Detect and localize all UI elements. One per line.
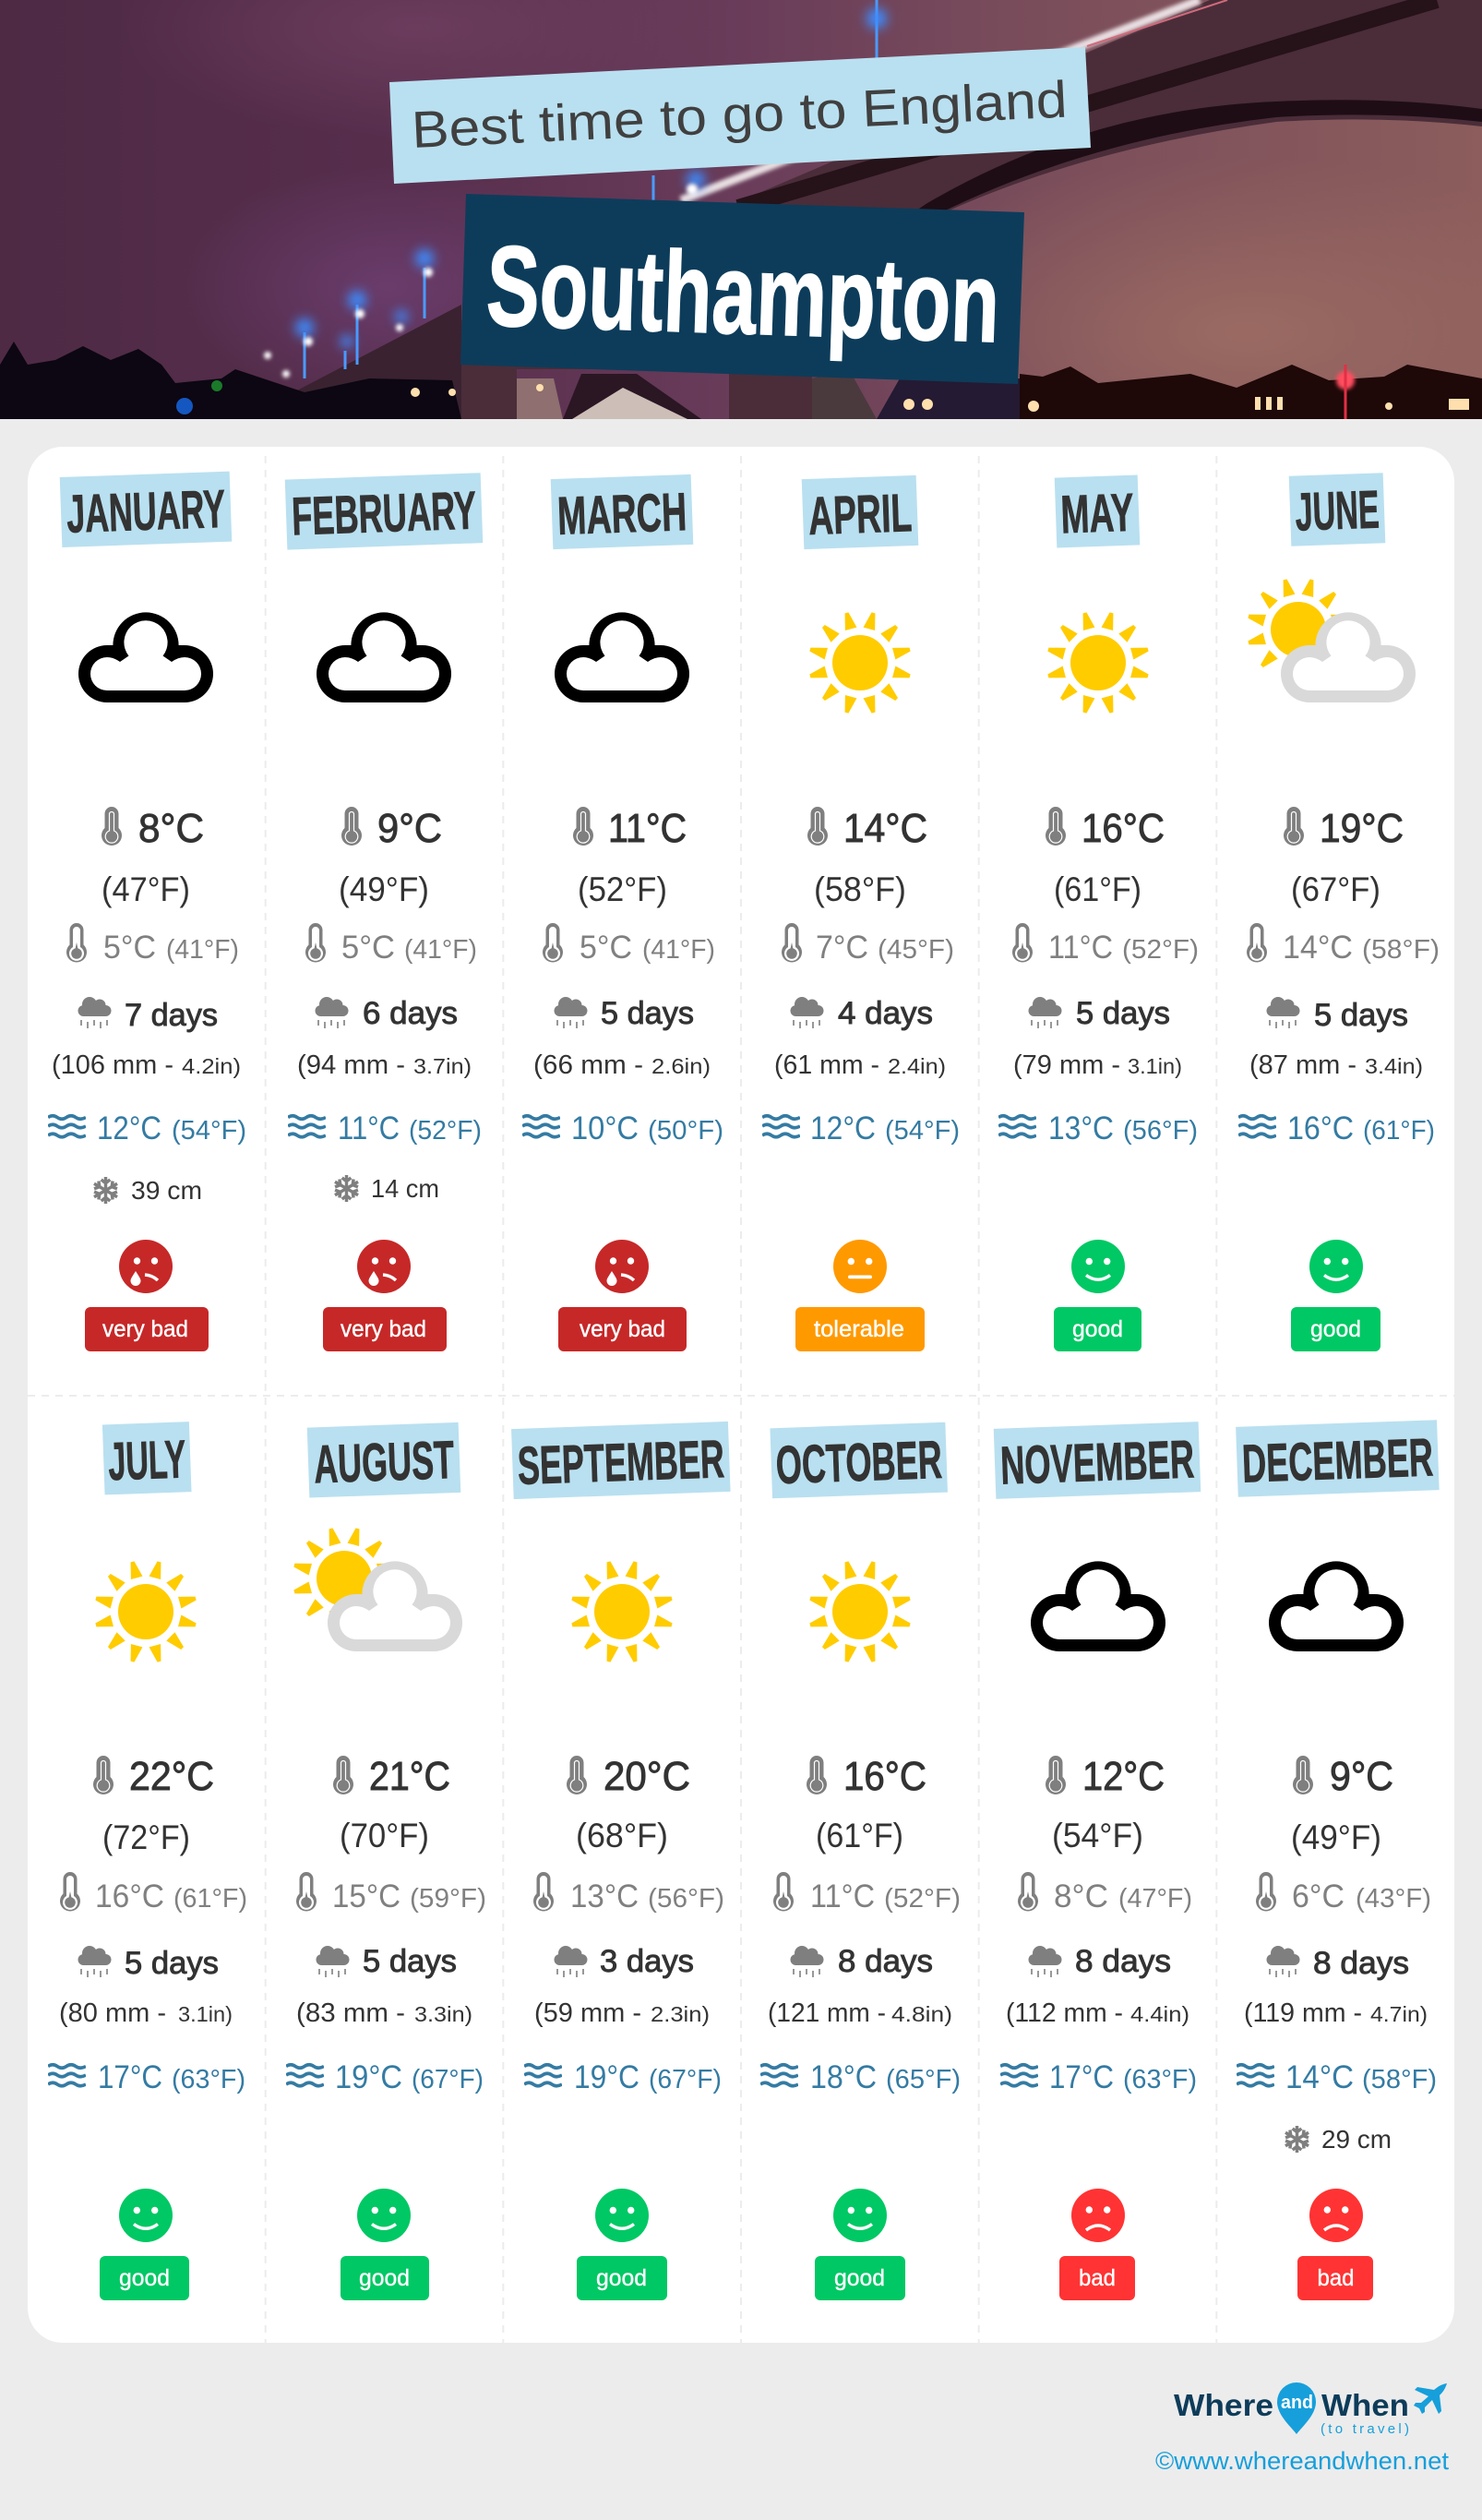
rainfall [768, 1998, 952, 2028]
sea temperature [522, 1110, 723, 1146]
high temperature: 21°C [369, 1754, 450, 1799]
rainfall: 3.1in) [1128, 1054, 1182, 1078]
icon: very bad face [119, 1240, 173, 1293]
high temperature Fahrenheit: (61°F) [1054, 870, 1141, 908]
sea temperature: 18°C [810, 2059, 877, 2095]
low temperature [773, 1872, 961, 1914]
column: September [511, 1422, 731, 2300]
high temperature [567, 1754, 690, 1799]
rain days [790, 1944, 933, 1979]
rating badge [1059, 2256, 1135, 2300]
icon: sun [808, 611, 912, 714]
heading: June [1289, 473, 1385, 546]
low temperature: (41°F) [642, 935, 715, 965]
low temperature [60, 1872, 247, 1914]
low temperature [782, 923, 954, 966]
low temperature: (52°F) [884, 1884, 961, 1914]
sea temperature: (50°F) [648, 1116, 723, 1146]
low temperature: 7°C [816, 930, 868, 966]
rain days [1266, 1946, 1409, 1981]
sea temperature: 14°C [1285, 2059, 1354, 2095]
snow depth: 39 cm [131, 1176, 202, 1205]
icon: sun [1046, 611, 1150, 714]
high temperature: 22°C [129, 1754, 214, 1799]
rain days [78, 1946, 219, 1981]
rating badge: tolerable [814, 1316, 904, 1342]
snow depth [92, 1176, 202, 1205]
icon: map pin [1277, 2382, 1316, 2434]
sea temperature: 17°C [1049, 2059, 1114, 2095]
low temperature: 11°C [810, 1878, 875, 1914]
sea temperature [48, 2059, 245, 2095]
rain days [316, 1944, 457, 1979]
rainfall [533, 1050, 711, 1080]
title: Southampton [460, 194, 1024, 384]
low temperature [296, 1872, 486, 1914]
low temperature [305, 923, 477, 966]
sea temperature: 11°C [338, 1110, 400, 1146]
high temperature Fahrenheit: (61°F) [816, 1817, 903, 1854]
low temperature: 16°C [95, 1878, 164, 1914]
column: March [522, 474, 723, 1351]
high temperature Fahrenheit: (49°F) [1291, 1818, 1381, 1856]
heading: January [60, 472, 232, 547]
column: May [998, 474, 1199, 1351]
rainfall: (66 mm - [533, 1050, 643, 1080]
high temperature [1293, 1754, 1393, 1799]
high temperature Fahrenheit: (54°F) [1052, 1817, 1143, 1854]
heading: February [285, 473, 483, 550]
rainfall: 3.1in) [178, 2002, 233, 2026]
heading: June: JUNE [1294, 479, 1380, 543]
rainfall [296, 1998, 472, 2028]
icon: cloud [317, 612, 451, 702]
rain days: 4 days [838, 996, 933, 1031]
low temperature [1256, 1872, 1431, 1914]
high temperature Fahrenheit: (70°F) [340, 1817, 429, 1854]
rainfall [1013, 1050, 1182, 1080]
rain days [1266, 997, 1408, 1033]
high temperature: 16°C [1082, 806, 1165, 851]
sea temperature [286, 2059, 484, 2095]
high temperature: 11°C [608, 806, 687, 851]
rain days: 5 days [1076, 996, 1170, 1031]
rainfall: 3.4in) [1365, 1054, 1423, 1078]
heading: November: NOVEMBER [999, 1429, 1195, 1496]
rating badge [795, 1307, 925, 1351]
low temperature: 5°C [103, 930, 156, 966]
rain days: 5 days [601, 996, 694, 1031]
sea temperature [762, 1110, 960, 1146]
rain days [790, 996, 933, 1031]
rating badge: bad [1079, 2265, 1116, 2291]
rating badge [1297, 2256, 1373, 2300]
rainfall: (94 mm - [297, 1050, 405, 1080]
rainfall: (121 mm - [768, 1998, 886, 2028]
column: November [994, 1422, 1201, 2300]
sea temperature [998, 1110, 1198, 1146]
rainfall: 4.2in) [182, 1054, 241, 1078]
low temperature: (58°F) [1362, 935, 1440, 965]
heading: October: OCTOBER [775, 1430, 943, 1495]
heading: July: JULY [107, 1429, 186, 1492]
rainfall: 2.6in) [651, 1054, 711, 1078]
rating badge: good [834, 2265, 885, 2291]
heading: May: MAY [1059, 483, 1135, 545]
icon: sun [808, 1560, 912, 1663]
rain days [1028, 1944, 1171, 1979]
high temperature Fahrenheit: (47°F) [102, 870, 190, 908]
icon: smiling face [1309, 1240, 1363, 1293]
sea temperature: (65°F) [886, 2065, 961, 2094]
snow depth: 14 cm [371, 1174, 439, 1203]
rain days [554, 1944, 694, 1979]
heading: October [770, 1422, 948, 1498]
rain days: 6 days [363, 996, 458, 1031]
sea temperature: 13°C [1048, 1110, 1114, 1146]
low temperature: (43°F) [1356, 1884, 1431, 1914]
rain days: 5 days [125, 1946, 219, 1981]
sea temperature: (54°F) [172, 1116, 246, 1146]
rainfall: 2.3in) [651, 2002, 710, 2026]
sea temperature: (56°F) [1123, 1116, 1198, 1146]
icon: sun behind cloud [1247, 578, 1416, 702]
rating badge: good [1072, 1316, 1123, 1342]
low temperature: 15°C [332, 1878, 400, 1914]
low temperature: (41°F) [404, 935, 477, 965]
heading: April: APRIL [807, 483, 913, 546]
column: June [1238, 473, 1440, 1351]
rain days: 8 days [1075, 1944, 1171, 1979]
rating badge [323, 1307, 447, 1351]
low temperature [1247, 923, 1440, 966]
title: Best time to go to England [389, 47, 1091, 184]
high temperature [341, 806, 442, 851]
rain days: 8 days [1313, 1946, 1409, 1981]
rainfall: (87 mm - [1249, 1050, 1357, 1080]
icon: smiling face [595, 2189, 649, 2242]
logo: Where and When: (to travel) [1321, 2421, 1409, 2437]
rain days: 3 days [600, 1944, 694, 1979]
rating badge [85, 1307, 209, 1351]
high temperature Fahrenheit: (68°F) [576, 1817, 668, 1854]
rainfall [1006, 1998, 1189, 2028]
rating badge [100, 2256, 189, 2300]
rating badge [1291, 1307, 1380, 1351]
icon: very bad face [357, 1240, 411, 1293]
snow depth [1284, 2125, 1392, 2154]
rainfall: (106 mm - [52, 1050, 173, 1080]
high temperature Fahrenheit: (72°F) [102, 1818, 190, 1856]
low temperature: 5°C [580, 930, 632, 966]
high temperature [573, 806, 687, 851]
column: January [48, 472, 246, 1351]
low temperature: 6°C [1292, 1878, 1345, 1914]
low temperature: 8°C [1054, 1878, 1108, 1914]
icon: sun [570, 1560, 674, 1663]
snow depth: 29 cm [1321, 2125, 1392, 2154]
heading: May [1055, 474, 1140, 548]
panel: monthly weather table [28, 447, 1454, 2343]
rating badge: bad [1318, 2265, 1355, 2291]
column: April [762, 475, 960, 1351]
rainfall [59, 1998, 233, 2028]
heading: July [102, 1422, 191, 1494]
high temperature [1284, 806, 1404, 851]
icon: cloud [555, 612, 689, 702]
rain days: 8 days [838, 1944, 933, 1979]
sea temperature: 19°C [335, 2059, 402, 2095]
rating badge: good [596, 2265, 647, 2291]
sea temperature: 17°C [98, 2059, 162, 2095]
hero photo: illuminated bridge at night [0, 0, 1482, 419]
sea temperature: (63°F) [1123, 2065, 1197, 2094]
high temperature [333, 1754, 450, 1799]
rainfall: 3.7in) [413, 1054, 472, 1078]
high temperature Fahrenheit: (52°F) [578, 870, 667, 908]
rainfall: 4.8in) [891, 2002, 952, 2026]
heading: April [802, 475, 918, 549]
rain days [316, 996, 458, 1031]
high temperature: 20°C [604, 1754, 690, 1799]
icon: smiling face [357, 2189, 411, 2242]
rainfall: (79 mm - [1013, 1050, 1120, 1080]
high temperature [1046, 1754, 1165, 1799]
rating badge: good [1310, 1316, 1361, 1342]
rainfall: (59 mm - [534, 1998, 641, 2028]
heading: February: FEBRUARY [291, 480, 477, 546]
heading: September [511, 1422, 731, 1499]
low temperature [1018, 1872, 1192, 1914]
rain days: 5 days [1314, 998, 1408, 1033]
rating badge [558, 1307, 687, 1351]
logo: Where and When: When [1321, 2388, 1409, 2422]
low temperature: (45°F) [878, 935, 954, 965]
title: Best time to go to England: Best time to go to England [411, 70, 1069, 159]
rainfall [1249, 1050, 1423, 1080]
sea temperature [524, 2059, 722, 2095]
high temperature [1046, 806, 1165, 851]
rainfall: 4.7in) [1370, 2002, 1428, 2026]
high temperature: 9°C [377, 806, 442, 851]
sea temperature [288, 1110, 482, 1146]
rating badge [1054, 1307, 1141, 1351]
title: Southampton: Southampton [484, 222, 1001, 366]
column: July [48, 1422, 247, 2300]
rainfall [774, 1050, 946, 1080]
column: February [285, 473, 483, 1351]
high temperature: 19°C [1320, 806, 1404, 851]
low temperature: 11°C [1048, 930, 1113, 966]
column: October [760, 1422, 961, 2300]
sea temperature [1000, 2059, 1197, 2095]
sea temperature: (67°F) [412, 2065, 484, 2094]
sea temperature: (52°F) [409, 1116, 482, 1146]
rating badge [341, 2256, 429, 2300]
low temperature: (56°F) [648, 1884, 724, 1914]
rating badge: very bad [580, 1316, 665, 1342]
rainfall: (112 mm - [1006, 1998, 1123, 2028]
sea temperature: 10°C [571, 1110, 639, 1146]
low temperature: (41°F) [166, 935, 239, 965]
icon: smiling face [833, 2189, 887, 2242]
heading: March [551, 474, 693, 549]
low temperature: (61°F) [173, 1884, 247, 1914]
heading: August: AUGUST [313, 1430, 455, 1494]
sea temperature: (54°F) [885, 1116, 960, 1146]
icon: smiling face [119, 2189, 173, 2242]
snow depth [333, 1174, 439, 1203]
sea temperature: (63°F) [172, 2065, 245, 2094]
rating badge: good [119, 2265, 170, 2291]
rainfall: (80 mm - [59, 1998, 166, 2028]
rainfall: (61 mm - [774, 1050, 879, 1080]
rainfall [297, 1050, 472, 1080]
low temperature: 5°C [341, 930, 395, 966]
high temperature [807, 1754, 926, 1799]
sea temperature: 16°C [1287, 1110, 1354, 1146]
high temperature [102, 806, 204, 851]
rating badge: very bad [102, 1316, 188, 1342]
rainfall: 4.4in) [1130, 2002, 1189, 2026]
heading: September: SEPTEMBER [517, 1429, 725, 1496]
high temperature: 16°C [843, 1754, 926, 1799]
rain days: 7 days [125, 998, 218, 1033]
low temperature: (47°F) [1118, 1884, 1192, 1914]
rainfall: (83 mm - [296, 1998, 405, 2028]
icon: sad face [1071, 2189, 1125, 2242]
logo: Where and When [1174, 2382, 1447, 2437]
column: December [1236, 1420, 1440, 2300]
high temperature: 9°C [1330, 1754, 1393, 1799]
icon: cloud [78, 612, 213, 702]
low temperature: 13°C [570, 1878, 639, 1914]
low temperature [543, 923, 715, 966]
rainfall [1244, 1998, 1428, 2028]
high temperature [93, 1754, 214, 1799]
rating badge: good [359, 2265, 410, 2291]
icon: very bad face [595, 1240, 649, 1293]
heading: August [307, 1422, 460, 1498]
sea temperature [48, 1110, 246, 1146]
rainfall: (119 mm - [1244, 1998, 1362, 2028]
rainfall [534, 1998, 710, 2028]
high temperature: 14°C [843, 806, 927, 851]
logo: Where and When: and [1281, 2393, 1313, 2413]
rainfall: 3.3in) [414, 2002, 472, 2026]
rain days [554, 996, 694, 1031]
sea temperature: 19°C [574, 2059, 639, 2095]
column: August [286, 1422, 486, 2300]
rating badge [577, 2256, 667, 2300]
rainfall: 2.4in) [888, 1054, 946, 1078]
high temperature [807, 806, 927, 851]
logo: Where and When: Where [1174, 2388, 1273, 2422]
low temperature: (52°F) [1122, 935, 1199, 965]
sea temperature: (58°F) [1362, 2065, 1437, 2094]
rainfall [52, 1050, 241, 1080]
low temperature [66, 923, 239, 966]
low temperature [1012, 923, 1199, 966]
heading: March: MARCH [556, 482, 687, 546]
low temperature [533, 1872, 724, 1914]
high temperature Fahrenheit: (67°F) [1291, 870, 1380, 908]
icon: cloud [1269, 1561, 1404, 1651]
sea temperature: (61°F) [1363, 1116, 1435, 1146]
rain days [1028, 996, 1170, 1031]
icon: airplane [1414, 2383, 1447, 2414]
website credit: ©www.whereandwhen.net [1155, 2447, 1449, 2475]
icon: smiling face [1071, 1240, 1125, 1293]
sea temperature: (67°F) [649, 2065, 722, 2094]
icon: sad face [1309, 2189, 1363, 2242]
sea temperature [760, 2059, 961, 2095]
icon: sun behind cloud [293, 1527, 462, 1651]
high temperature Fahrenheit: (58°F) [814, 870, 906, 908]
high temperature: 12°C [1082, 1754, 1165, 1799]
icon: neutral face [833, 1240, 887, 1293]
rain days [78, 997, 218, 1033]
rating badge [815, 2256, 905, 2300]
sea temperature: 12°C [97, 1110, 161, 1146]
low temperature: (59°F) [410, 1884, 486, 1914]
low temperature: 14°C [1283, 930, 1353, 966]
rain days: 5 days [363, 1944, 457, 1979]
heading: November [994, 1422, 1201, 1499]
sea temperature: 12°C [810, 1110, 876, 1146]
sea temperature [1237, 2059, 1437, 2095]
icon: sun [94, 1560, 197, 1663]
high temperature: 8°C [138, 806, 204, 851]
high temperature Fahrenheit: (49°F) [339, 870, 429, 908]
sea temperature [1238, 1110, 1435, 1146]
heading: January: JANUARY [66, 479, 226, 545]
rating badge: very bad [341, 1316, 426, 1342]
icon: cloud [1031, 1561, 1165, 1651]
